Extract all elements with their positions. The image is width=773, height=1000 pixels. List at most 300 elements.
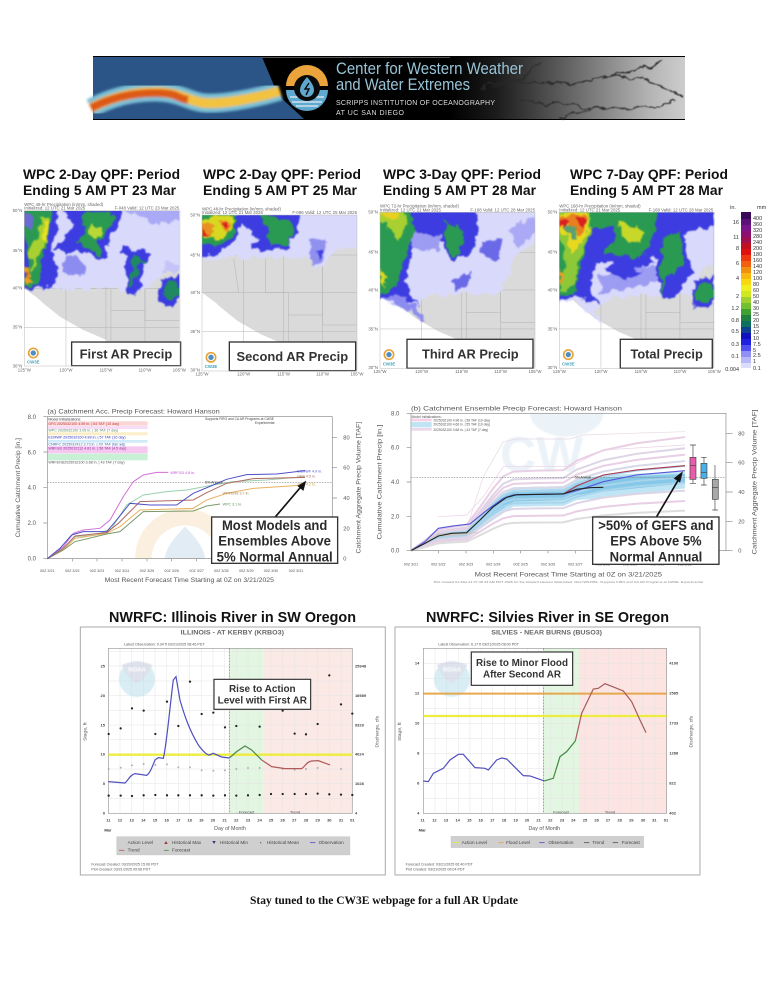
legend: precipitation colorbar: mm [757,205,767,211]
axis labels: 27 [292,817,297,822]
model labels: ECMWF 4.9 in. [297,469,322,473]
legend: precipitation colorbar: 4 [736,276,739,282]
axis labels: 11 [421,817,426,822]
axis tick labels: 00Z 3/24 [115,569,129,573]
model initializations legend: CNRFC 2025032412 3.73 in. | XX TAF (fair adj) [48,443,125,447]
axis labels: 28 [617,817,623,822]
legend: precipitation colorbar: 0.3 [731,342,739,348]
map: second AR precip: WPC 48-hr Precipitation (in/mm, shaded) [202,206,281,211]
axis tick labels: 00Z 3/30 [650,562,665,566]
map: first AR precip: F-048 Valid: 12 UTC 23 Mar 2025 [115,206,180,211]
legend: precipitation colorbar: 16 [733,220,739,226]
model initializations legend: GFS 2025032100 4.59 in. | 54 TAF (10 day) [48,422,119,426]
callout: rise to action level: Level with First AR [218,695,307,706]
axis tick labels: 2.0 [391,514,400,520]
legend: precipitation colorbar: 2.5 [753,353,761,359]
axis tick labels: 2.0 [28,521,37,527]
ensemble means [411,466,685,551]
legend: Historical Min [220,840,248,845]
legend: Forecast [622,840,640,845]
axis labels: 16 [478,817,484,822]
heading: WPC 2-day 23 Mar: Ending 5 AM PT 23 Mar [23,182,177,198]
axis tick labels: 00Z 3/27 [568,562,583,566]
axis labels: Trend [290,809,300,814]
heading: WPC 7-day 28 Mar: WPC 7-Day QPF: Period [570,166,728,182]
panel: Silvies River hydrograph [395,627,700,875]
NOAA watermark [434,661,470,697]
legend: precipitation colorbar: 11 [733,235,739,241]
legend: precipitation colorbar: 50 [753,294,759,300]
banner: CW3E header [91,56,685,120]
legend [451,836,644,848]
axis labels: 5 [103,781,106,786]
legend: Historical Max [172,840,202,845]
map: first AR precip: WPC 48-hr Precipitation (in/mm, shaded) [24,202,104,207]
box plots [690,445,718,510]
axis labels: 4100 [669,661,679,666]
legend: precipitation colorbar: 0.5 [731,329,739,335]
callout: third AR precip [407,339,533,368]
model initializations legend: WRFGD 2025032112 4.81 in. | 56 TAF (4.5 day) [48,447,126,451]
axis labels: Stage, ft [397,722,403,741]
legend: precipitation colorbar: 80 [753,282,759,288]
axis labels: Latest Observation: 9.34 ft 03/21/2025 08:46 PDT [124,642,205,646]
axis labels: Forecast Created: 03/20/2025 15:06 PDT [91,862,159,866]
legend: precipitation colorbar: 0.1 [753,366,761,372]
axis labels: 4 [417,810,420,815]
model labels [170,417,322,506]
legend: precipitation colorbar: 200 [753,246,762,252]
axis labels: Latest Observation: 6.17 ft 03/21/2025 08:00 PDT [438,642,520,646]
legend: Flood Level [506,840,530,845]
axis labels: 29 [315,817,321,822]
axis labels: 13 [444,817,449,822]
legend [117,837,350,855]
axis tick labels: 00Z 3/27 [189,569,204,573]
chart: catchment accumulated precip forecast [16,409,363,584]
map: second AR precip: Initialized: 12 UTC 21 Mar 2025 [202,210,263,215]
axis labels: 1028 [355,781,365,786]
axis labels: 15 [467,817,472,822]
callout: GEFS and EPS: EPS Above 5% [610,533,702,549]
legend: precipitation colorbar: 2 [736,294,739,300]
callout: rise to action level [214,679,311,709]
axis tick labels: 00Z 3/28 [214,569,229,573]
legend: Observation [319,840,344,845]
axis tick labels: 00Z 3/31 [289,569,303,573]
y axis label right: Catchment Aggregate Precip Volume [TAF] [357,421,363,553]
axis labels: 8 [417,751,420,756]
legend: precipitation colorbar: 25 [753,312,759,318]
axis labels: 822 [669,781,677,786]
legend: precipitation colorbar: 360 [753,222,762,228]
callout: most models: Ensembles Above [218,533,331,549]
axis tick labels [391,411,745,566]
axis tick labels: 0 [343,557,346,563]
chart legend: 2025032100 4.96 in. | 58 TAF (10 day) [433,419,490,423]
axis tick labels: 60 [343,466,350,472]
frame and axes [407,413,733,553]
axis labels: 11 [106,817,111,822]
axis tick labels: 00Z 3/25 [513,562,528,566]
legend: precipitation colorbar: 40 [753,300,759,306]
y axis label left: Cumulative Catchment Precip [in.] [16,438,22,537]
legend: precipitation colorbar: 180 [753,252,762,258]
legend: precipitation colorbar: 7.5 [753,342,761,348]
axis labels: 28 [304,817,309,822]
axis tick labels: 00Z 3/21 [404,562,418,566]
map: third AR precip: Initialized: 12 UTC 21 Mar 2025 [380,207,441,212]
callout: rise to action level: Rise to Action [229,684,296,695]
axis tick labels: 00Z 3/29 [623,562,637,566]
footnote: Plot created 01-Mar-21 07:40:43 AM PDT 2025 for the Howard Hanson Watershed. Res=WS3361. Supports FIRO and CA AR Programs at CW3E. Experimental [434,580,703,584]
callout: most models [212,517,338,564]
heading: WPC 7-day 28 Mar: Ending 5 AM PT 28 Mar [570,182,724,198]
logo: CW3E circle [286,65,328,111]
legend: precipitation colorbar: 0.004 [725,367,739,373]
axis labels: 20 [525,817,530,822]
axis labels: 25948 [355,663,367,668]
axis tick labels: 00Z 3/30 [264,569,278,573]
map: second AR precip [190,206,364,377]
axis tick labels: 40 [343,496,350,502]
x axis label: Most Recent Forecast Time Starting at 0Z on 3/21/2025 [475,571,662,578]
chart legend [412,415,591,480]
5% annual line [47,481,332,483]
callout: total precip: Total Precip [630,346,703,361]
axis labels: 01 [350,817,355,822]
model initializations legend: WRFENS2025032100 3.68 in. | 43 TAF (7 day) [48,460,125,464]
axis labels: 22 [548,817,553,822]
legend: precipitation colorbar: 20 [753,318,759,324]
axis labels: Trend [605,809,615,814]
axis labels: 18 [502,817,507,822]
map: third AR precip: WPC 72-hr Precipitation (in/mm, shaded) [380,204,459,209]
legend: Action Level [128,840,153,845]
legend: Historical Mean [267,840,299,845]
axis labels: SILVIES - NEAR BURNS (BUSO3) [491,629,602,636]
axis tick labels: 00Z 3/28 [595,562,610,566]
axis tick labels: 00Z 3/31 [677,562,692,566]
axis labels: 17 [176,817,181,822]
y axis label right: Catchment Aggregate Precip Volume [TAF] [753,409,759,554]
model initializations legend: ECMWF 2025032100 4.89 in. | 57 TAF (10 day) [48,436,126,440]
axis labels: 10 [101,752,106,757]
callout: GEFS and EPS: >50% of GEFS and [598,517,714,533]
heading: WPC 2-day 25 Mar: Ending 5 AM PT 25 Mar [203,182,358,198]
footer text: Stay tuned to the CW3E webpage for a full AR Update [250,893,519,907]
chart legend: Model Initializations: [412,415,442,419]
axis tick labels: 00Z 3/26 [541,562,555,566]
axis tick labels: 6.0 [28,450,37,456]
axis labels: 26 [594,817,600,822]
axis tick labels: 00Z 3/29 [239,569,254,573]
axis labels: 15 [153,817,158,822]
legend: precipitation colorbar: 15 [753,324,759,330]
heading: Silvies River: NWRFC: Silvies River in SE Oregon [426,609,669,626]
legend: Forecast [172,848,191,853]
axis labels: 21 [536,817,542,822]
chart legend: 2025032100 3.68 in. | 43 TAF (7 day) [433,428,488,432]
legend: precipitation colorbar: 1.2 [731,306,739,312]
legend: precipitation colorbar: 240 [753,240,762,246]
axis tick labels: 00Z 3/25 [140,569,154,573]
axis tick labels: 00Z 3/23 [459,562,473,566]
NOAA watermark: NOAA [443,668,461,674]
axis labels [83,629,380,871]
axis tick labels: 00Z 3/23 [90,569,104,573]
banner text: and Water Extremes [336,75,470,94]
map: total precip: Initialized: 12 UTC 21 Mar 2025 [559,207,621,212]
heading: WPC 3-day 28 Mar: WPC 3-Day QPF: Period [383,166,541,182]
legend: precipitation colorbar: 6 [736,261,739,267]
model initializations legend: Model Initializations: [48,418,81,422]
axis labels: 25 [101,663,106,668]
heading: WPC 2-day 25 Mar: WPC 2-Day QPF: Period [203,166,361,182]
axis labels: 25 [269,817,274,822]
axis labels: 14 [455,817,461,822]
axis labels: 17 [490,817,495,822]
axis labels: Plot Created: 03/21/2025 09:04 PDT [406,867,466,871]
legend: precipitation colorbar: 160 [753,258,762,264]
axis labels: Mar [419,828,426,833]
callout: second AR precip [229,342,356,371]
axis labels: Day of Month [528,826,560,832]
model labels: WRFGD 4.8 in. [170,471,195,475]
legend: precipitation colorbar: 12 [753,330,759,336]
axis tick labels: 4.0 [28,486,37,492]
axis labels: 4 [355,810,358,815]
map: total precip: WPC 168-hr Precipitation (in/mm, shaded) [559,204,641,209]
axis tick labels: 00Z 3/22 [65,569,80,573]
chart title: (b) Catchment Ensemble Precip Forecast: Howard Hanson [411,405,622,412]
axis labels: 14 [141,817,146,822]
axis labels: 20 [101,693,106,698]
axis labels: 30 [641,817,646,822]
legend: Observation [548,840,574,845]
axis labels: 14 [415,661,420,666]
axis labels: 18 [187,817,193,822]
banner text: Center for Western Weather [336,59,523,78]
model labels: Supports FIRO and CA AR Programs at CW3E [205,417,275,421]
axis tick labels: 4.0 [391,480,400,486]
axis labels: 20 [211,817,216,822]
map: second AR precip: F-096 Valid: 12 UTC 25 Mar 2025 [292,210,358,215]
plot background [423,648,667,813]
axis labels: 24 [571,817,576,822]
heading: Illinois River: NWRFC: Illinois River in SW Oregon [109,609,356,626]
banner text: AT UC SAN DIEGO [336,110,405,117]
legend: precipitation colorbar: 320 [753,228,762,234]
axis labels: 23 [560,817,565,822]
axis labels: 22 [234,817,239,822]
callout: first AR precip [72,342,181,366]
legend: precipitation colorbar: 1 [753,359,756,365]
axis labels: 0 [103,810,106,815]
model lines [47,471,305,559]
axis labels [397,629,695,871]
watermark: CW [500,427,584,483]
legend: Trend [592,840,605,845]
callout: rise to minor flood: Rise to Minor Flood [476,658,568,669]
axis tick labels: 0 [738,549,741,555]
model initializations legend [48,418,148,464]
legend: precipitation colorbar: 0.8 [731,318,739,324]
axis labels: Day of Month [214,826,246,832]
axis tick labels: 20 [343,526,350,532]
chart title: (a) Catchment Acc. Precip Forecast: Howard Hanson [47,409,220,416]
legend: precipitation colorbar: in. [730,205,736,211]
NOAA watermark [119,661,155,697]
map: third AR precip: F-168 Valid: 12 UTC 28 Mar 2025 [470,207,536,212]
model labels: WRFENS 3.7 in. [223,491,249,495]
callout: most models: 5% Normal Annual [217,548,333,564]
hydrograph line [108,677,330,783]
callout: total precip [620,339,712,368]
axis tick labels [28,415,350,573]
chart: catchment ensemble precip forecast [378,405,759,584]
legend: precipitation colorbar: 400 [753,216,762,222]
legend: Trend [128,848,140,853]
axis tick labels: 60 [738,461,745,467]
axis labels: 10 [415,721,420,726]
axis labels: Forecast Created: 03/21/2025 06:40 PDT [406,862,474,866]
model labels: 5% Annual [205,480,223,484]
legend: precipitation colorbar: 10 [753,336,759,342]
arrow [657,472,683,517]
axis tick labels: 6.0 [391,446,400,452]
legend: precipitation colorbar [725,205,767,373]
axis labels: Forecast [239,809,255,814]
axis tick labels: 8.0 [28,415,37,421]
axis labels: 16989 [355,693,367,698]
panel: Illinois River hydrograph [80,627,385,875]
chart frame [43,417,337,561]
callout: GEFS and EPS [593,517,719,564]
axis labels: 19 [513,817,519,822]
callout: rise to minor flood: After Second AR [483,670,561,681]
callout: third AR precip: Third AR Precip [422,346,519,361]
axis labels: 27 [606,817,611,822]
callout: first AR precip: First AR Precip [80,346,172,361]
axis labels: 31 [652,817,657,822]
axis labels: Discharge, cfs [374,715,380,747]
flood and action level lines [423,694,667,716]
axis labels: 12 [432,817,437,822]
axis labels: 12 [415,691,420,696]
axis tick labels: 80 [343,435,350,441]
axis labels: 16 [164,817,170,822]
legend: precipitation colorbar: 140 [753,264,762,270]
plot background [108,648,352,813]
map: total precip [548,204,722,374]
axis labels: ILLINOIS - AT KERBY (KRBO3) [181,629,284,636]
legend: precipitation colorbar: 280 [753,234,762,240]
model initializations legend: WPC 2025032100 3.05 in. | 36 TAF (7 day) [48,428,118,432]
axis tick labels: 20 [738,519,745,525]
chart legend: 5% Annual [575,476,591,480]
banner text [336,59,523,117]
callout: rise to minor flood [471,652,573,685]
legend: precipitation colorbar: 120 [753,270,762,276]
axis labels: Plot Created: 03/21/2025 09:06 PDT [91,867,151,871]
axis tick labels: 80 [738,431,745,437]
axis labels: 19 [199,817,204,822]
hydrograph line [423,684,646,782]
legend: precipitation colorbar: 100 [753,276,762,282]
callout: GEFS and EPS: Normal Annual [610,548,702,564]
axis labels: 4024 [355,752,365,757]
axis labels: Stage, ft [83,722,89,741]
axis labels: 402 [669,810,677,815]
axis tick labels: 00Z 3/21 [40,569,55,573]
watermark [500,413,603,483]
axis tick labels: 00Z 3/24 [486,562,501,566]
legend: precipitation colorbar: 60 [753,288,759,294]
legend: precipitation colorbar: 30 [753,306,759,312]
axis labels: 25 [583,817,588,822]
axis labels: 30 [327,817,332,822]
ensemble spaghetti [411,432,685,551]
axis labels: 24 [257,817,263,822]
map: total precip: F-168 Valid: 12 UTC 28 Mar 2025 [649,207,714,212]
axis labels: 2565 [669,691,679,696]
axis labels: 01 [664,817,669,822]
axis tick labels: 40 [738,490,745,496]
legend: precipitation colorbar: 5 [753,348,756,354]
axis labels: 12 [118,817,123,822]
axis labels: 15 [101,722,106,727]
axis labels: 26 [280,817,286,822]
axis tick labels: 00Z 3/26 [164,569,179,573]
NOAA watermark: NOAA [128,668,146,674]
arrow [275,481,306,517]
axis labels: 1733 [669,721,679,726]
map: first AR precip: Initialized: 12 UTC 21 Mar 2025 [24,206,86,211]
map: first AR precip [13,202,187,372]
model labels: NBD 4.2 in. [297,483,316,487]
axis labels: Mar [104,828,112,833]
legend: precipitation colorbar: 8 [736,246,739,252]
axis tick labels: 8.0 [391,411,400,417]
axis tick labels: 00Z 3/22 [431,562,446,566]
y axis label left: Cumulative Catchment Precip [in.] [378,424,384,539]
x axis label: Most Recent Forecast Time Starting at 0Z on 3/21/2025 [105,577,274,584]
banner text: SCRIPPS INSTITUTION OF OCEANOGRAPHY [336,100,495,107]
model labels: Experimental [255,421,275,425]
axis labels: 1266 [669,751,679,756]
axis tick labels: 0.0 [28,557,37,563]
axis labels: 31 [339,817,344,822]
legend: precipitation colorbar: 0.1 [731,354,739,360]
axis labels: 9329 [355,722,365,727]
heading: WPC 3-day 28 Mar: Ending 5 AM PT 28 Mar [383,182,537,198]
axis labels: Discharge, cfs [689,715,695,747]
5% annual line [411,476,726,478]
callout: second AR precip: Second AR Precip [236,349,348,364]
axis labels: 6 [417,781,420,786]
axis labels: 21 [222,817,228,822]
axis labels: Forecast [553,809,570,814]
axis labels: 23 [246,817,251,822]
heading: WPC 2-day 23 Mar: WPC 2-Day QPF: Period [23,166,180,182]
model labels: WPC 3.1 in. [223,502,242,506]
axis tick labels: 0.0 [391,549,400,555]
model labels: GFS 4.5 in. [297,475,316,479]
action level line [108,751,352,758]
axis labels: 29 [629,817,634,822]
watermark logo [135,509,235,559]
